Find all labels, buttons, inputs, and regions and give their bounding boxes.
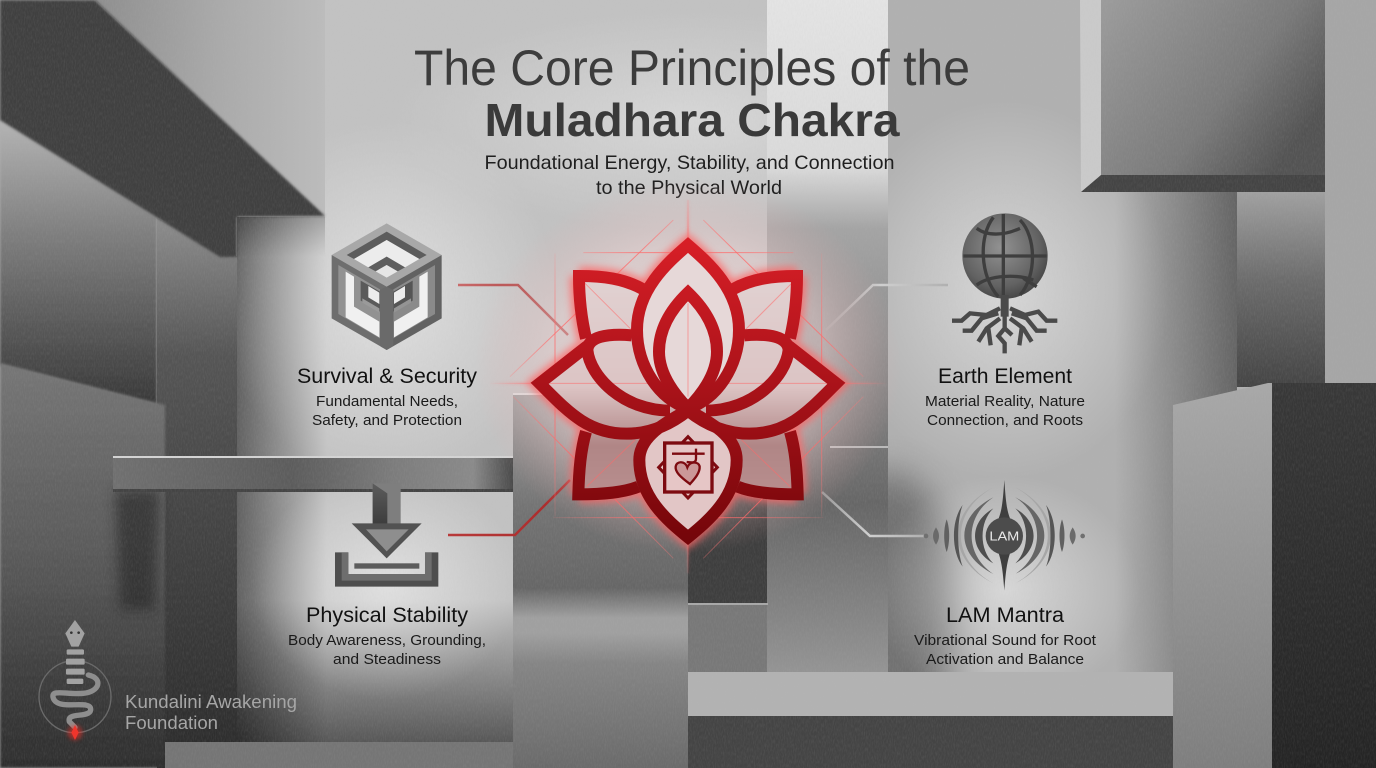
line glow [490,200,887,573]
right sound arcs [1015,487,1085,583]
serpent spine [65,620,85,684]
serpent body [53,675,98,727]
lotus chakra symbol [475,180,901,573]
icon: survival cube [332,223,442,350]
description [925,393,1085,429]
subtitle: to the Physical World [596,177,782,199]
logo mark [39,620,111,740]
metal bar [113,457,513,490]
title line two: Muladhara Chakra [484,94,900,146]
lower left block [0,363,165,768]
yantra diamond [659,437,717,498]
logo text: Kundalini Awakening [125,692,297,712]
description [288,632,486,668]
right side petal [688,335,836,434]
lotus halo [475,180,901,553]
lotus petals [540,245,836,537]
metal column [513,393,688,768]
light metal column [767,0,888,672]
description: Fundamental Needs, [316,393,458,410]
beam underside [0,0,325,257]
panel: survival and security [297,365,477,429]
upper left petal [579,276,643,338]
bottom petal [639,410,737,537]
petal interiors [540,245,836,537]
logo text [125,692,297,733]
description [312,393,462,429]
title [414,40,970,146]
tray bar [354,563,419,569]
description: Material Reality, Nature [925,393,1085,410]
lotus glow [540,245,836,537]
left side petal [540,335,688,434]
upper left concrete face [95,0,325,216]
title line one: The Core Principles of the [414,40,970,96]
LAM label: LAM [989,529,1019,544]
panel: physical stability [288,604,486,668]
far right column [1325,0,1376,385]
description: Connection, and Roots [927,412,1083,429]
upper right petal [733,276,797,338]
description: Safety, and Protection [312,412,462,429]
yantra square [665,443,712,492]
arrow head [352,523,422,558]
description [914,632,1097,668]
floor slab [688,672,1173,716]
top right block [1101,0,1325,176]
heading: Survival & Security [297,365,477,388]
left recess wall [0,120,157,405]
arrow shaft [373,483,401,525]
roots [952,295,1057,353]
under floor [688,716,1173,768]
icon: physical stability arrow [335,483,438,587]
logo ring [39,661,111,733]
metal edge lines [830,446,888,448]
subtitle [484,152,894,199]
description: Vibrational Sound for Root [914,632,1097,649]
central disc [986,517,1023,555]
subtitle: Foundational Energy, Stability, and Connection [484,152,894,174]
connector lines [448,285,948,536]
right recess [1237,192,1327,387]
heading: Physical Stability [306,604,469,627]
root yantra [659,437,717,498]
central spike [999,480,1010,591]
heading: Earth Element [938,365,1072,388]
yantra glyph bar and cross [672,449,705,462]
energy lines inside petals [549,283,827,487]
red energy lines [490,200,887,573]
panel: earth element [925,365,1085,429]
icon: LAM sound waves [924,480,1085,591]
icon: earth globe with roots [952,213,1057,353]
lower right block right face [1272,383,1376,768]
cube right face [387,255,442,350]
top outer petal [637,245,739,408]
top right block lower edge [1081,175,1325,192]
top inner petal [659,293,717,408]
centre and left lit wall [237,0,767,742]
shadow under bar [115,490,160,610]
heading: LAM Mantra [946,604,1064,627]
top right block bevel [1080,0,1101,192]
globe [962,213,1048,299]
serpent eyes [70,631,80,634]
logo text: Foundation [125,713,218,733]
yantra heart [676,462,700,484]
floor left [165,742,515,768]
red tail [68,725,82,740]
description: Activation and Balance [926,651,1084,668]
globe grid [963,214,1047,298]
lower right block left face [1173,383,1272,768]
tray [335,552,438,587]
lower right petal [738,432,798,494]
left sound arcs [924,487,993,583]
panel: LAM mantra [914,604,1097,668]
right wall [888,141,1237,672]
logo: Kundalini Awakening Foundation [39,620,297,740]
description: and Steadiness [333,651,441,668]
left recess column [157,218,237,768]
cube top face [332,223,442,287]
cube left face [332,255,387,350]
inner centre recess [688,393,768,605]
lower left petal [578,432,638,494]
description: Body Awareness, Grounding, [288,632,486,649]
